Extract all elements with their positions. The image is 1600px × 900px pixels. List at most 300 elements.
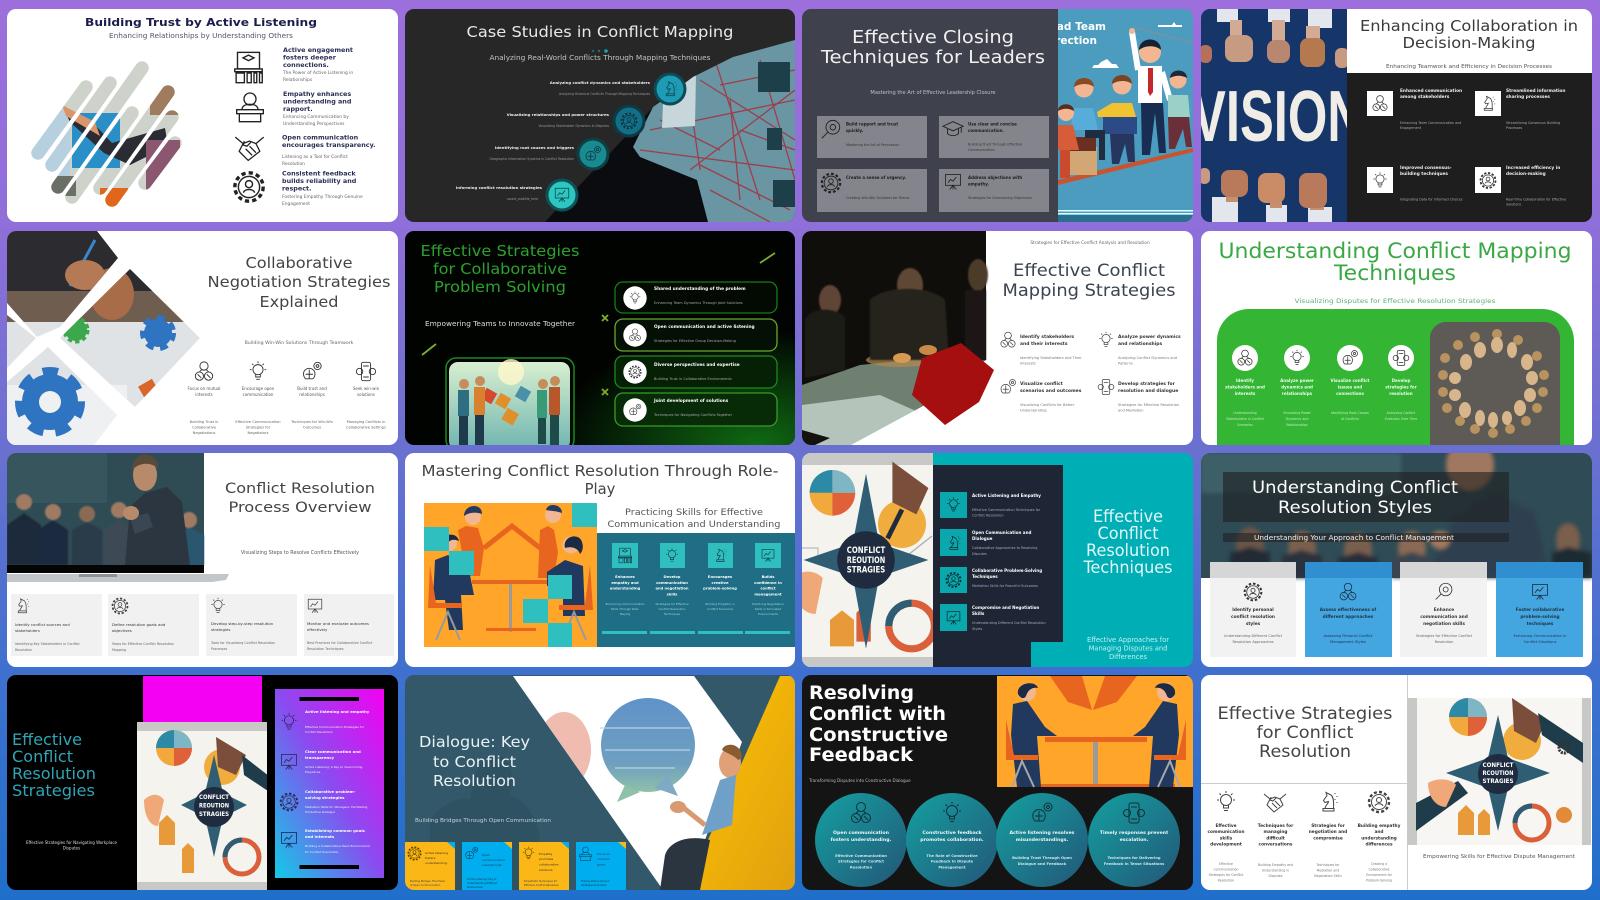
- step card 3: Tools for Visualizing Conflict Resolution: [210, 641, 275, 645]
- column 2: Encourage open: [242, 386, 275, 391]
- title: Dialogue: Key: [419, 733, 530, 751]
- box: rapport: Build rapport and trust: [846, 122, 898, 126]
- title: [820, 30, 1044, 66]
- step card 4: effectively: [307, 627, 328, 632]
- bubble 1: Effective Communication: [835, 854, 887, 858]
- laptop with pointing man photo: [7, 453, 229, 582]
- title: Play: [585, 481, 616, 498]
- decorative sparks: [422, 253, 775, 395]
- column 2: [650, 543, 695, 634]
- title: Resolving: [809, 683, 914, 704]
- style card 4: Enhancing Communication in: [1514, 634, 1566, 638]
- item 3: [281, 789, 367, 814]
- column 1: skills: [1220, 835, 1233, 841]
- item 2: [282, 749, 362, 774]
- bubble 1: Strategies for Conflict: [838, 860, 884, 864]
- item 3: Visualizing Conflicts for Better: [1020, 403, 1075, 407]
- item 2: Clear communication and: [305, 749, 361, 754]
- title: [12, 730, 96, 800]
- column 4: Environments: [758, 612, 778, 616]
- speech bubbles and speaker: [513, 676, 795, 890]
- tile 4: goals.: [597, 862, 606, 866]
- tile 1: understanding.: [425, 861, 448, 865]
- style card 4: Conflict Situations: [1524, 640, 1556, 644]
- conflict strategies poster: [1407, 698, 1591, 845]
- column 4: differences: [1365, 842, 1393, 848]
- title: Resolution: [12, 764, 96, 783]
- girl figure: [1058, 108, 1074, 121]
- column 2: dynamics and: [1281, 384, 1313, 390]
- title: [809, 683, 948, 766]
- boss figure: [1132, 32, 1138, 70]
- list item 2: Empathy enhances: [283, 90, 351, 98]
- step 2: Visualizing relationships and power structures: [507, 112, 610, 117]
- column 2: Conflict Resolution: [658, 607, 686, 611]
- tile 1: of Open Communication: [410, 883, 441, 887]
- column 2: skills: [667, 592, 678, 596]
- column 4: Problem-Solving: [1366, 878, 1392, 882]
- item 4: Strategies for Effective Resolution: [1118, 403, 1179, 407]
- style card 2: [1305, 562, 1392, 657]
- slide card: Understanding Conflict Mapping Techniques: [1201, 231, 1592, 445]
- title: [1362, 20, 1577, 51]
- slide card: Conflict Resolution Process Overview: [7, 453, 398, 667]
- gradient list panel: [275, 689, 384, 878]
- title: Building Trust by Active Listening: [85, 16, 317, 29]
- dark list panel: [933, 465, 1063, 667]
- conflict strategies poster: CONFLICT: [199, 793, 229, 801]
- column 4: management: [754, 592, 782, 596]
- list item 2: Enhancing Communication by: [283, 114, 349, 120]
- column 1: Enhances: [615, 575, 636, 579]
- slide card: Mastering Conflict Resolution Through Role-Play: [405, 453, 796, 667]
- box: objections: Address objections with: [968, 175, 1022, 180]
- bubble 4: Techniques for Delivering: [1107, 856, 1161, 860]
- teal content panel: [597, 533, 796, 647]
- title: Enhancing Collaboration in: [1360, 17, 1578, 35]
- item 2: and relationships: [1118, 341, 1163, 347]
- bubble 1: Resolution: [850, 865, 872, 869]
- column 1: Playing: [620, 612, 630, 616]
- step 1: Analyzing conflict dynamics and stakeholders: [550, 80, 651, 85]
- column 1: understanding: [610, 587, 641, 591]
- title: Effective: [12, 730, 82, 749]
- list item 4: respect.: [282, 184, 311, 192]
- tile 4: Focus on: [597, 852, 610, 856]
- step 3: Geographic Information Systems in Conflict Resolution: [489, 157, 574, 161]
- subtitle: Empowering Teams to Innovate Together: [425, 319, 575, 328]
- column 4: [745, 543, 790, 634]
- step card 1: [11, 594, 102, 656]
- step 3: [489, 138, 610, 170]
- style card 1: Identify personal: [1232, 607, 1274, 613]
- item 1: [1001, 332, 1082, 366]
- style card 1: Resolution Approaches: [1232, 640, 1274, 644]
- style card 3: negotiation skills: [1423, 621, 1465, 627]
- item 2: sharing processes: [1506, 94, 1550, 100]
- item 3: Productive Dialogue: [305, 810, 335, 814]
- subtitle: Practicing Skills for Effective: [625, 508, 763, 518]
- title: Conflict with: [809, 704, 946, 725]
- tile 2: communication: [482, 858, 505, 862]
- title: [420, 242, 580, 296]
- column 4: Collaborative Settings: [346, 426, 386, 430]
- column 1: empathy and: [611, 581, 639, 585]
- item 1: Engagement: [1400, 126, 1422, 130]
- item 4: Styles: [972, 627, 983, 631]
- item 2: Active Listening: A Key to Overcoming: [305, 765, 362, 769]
- subtitle: Visualizing Disputes for Effective Resolution Strategies: [1294, 297, 1496, 305]
- title: Conflict Resolution: [225, 481, 375, 497]
- horizontal divider: [1201, 783, 1407, 784]
- title: Resolution: [1259, 742, 1351, 761]
- column 3: Techniques for: [1315, 863, 1340, 867]
- column 3: of Conflicts: [1341, 417, 1359, 421]
- magenta block: [143, 676, 262, 722]
- diagonal photo strips: [31, 61, 182, 207]
- tile 4: Finding Mutual Ground: [581, 879, 610, 883]
- title: for Conflict: [1256, 723, 1354, 742]
- top subtitle: Strategies for Effective Conflict Analysis and Resolution: [1030, 240, 1150, 246]
- style card 3: [1400, 562, 1487, 657]
- slide card: Effective Conflict Resolution Techniques: [792, 453, 1193, 667]
- subtitle: [608, 508, 780, 530]
- title: Effective Strategies: [1218, 704, 1392, 723]
- subtitle: Building Win-Win Solutions Through Teamwork: [245, 340, 354, 346]
- item 1: Enhancing Team Communication and: [1400, 121, 1461, 125]
- title: [208, 254, 390, 311]
- column 4: Evolution Over Time: [1385, 417, 1417, 421]
- bubble 3: Building Trust Through Open: [1012, 856, 1072, 860]
- column 3: Conflict Scenarios: [707, 607, 733, 611]
- item 2: [1475, 88, 1565, 130]
- silhouette behind overlay: [430, 755, 540, 890]
- title: Mastering Conflict Resolution Through Role-: [422, 463, 778, 480]
- conflict strategies poster: RCOUTION: [1482, 769, 1514, 777]
- item 1: [940, 492, 1041, 518]
- slide card: Building Trust by Active Listening: [7, 9, 398, 222]
- style card 4: Foster collaborative: [1516, 607, 1564, 613]
- white diagonal cut: [851, 360, 986, 445]
- slide card: Collaborative Negotiation Strategies Explained: [7, 231, 398, 447]
- column 1: Resolution: [1218, 878, 1234, 882]
- step card 3: Develop step-by-step resolution: [211, 621, 274, 626]
- style card 3: communication and: [1420, 614, 1468, 620]
- column 4: [1358, 792, 1401, 882]
- box: clear communication: Use clear and concise: [968, 122, 1017, 126]
- title: Resolution: [1086, 541, 1170, 560]
- item 1: Interests: [1020, 362, 1036, 366]
- item 4: decision-making: [1506, 171, 1546, 177]
- bubble 4: Feedback in Tense Situations: [1104, 862, 1165, 866]
- column 4: solutions: [357, 392, 375, 397]
- box: urgency: [817, 169, 927, 212]
- item 3: Collaborative problem-: [305, 789, 356, 794]
- title: to Conflict: [433, 753, 516, 771]
- title: Conflict: [12, 747, 73, 766]
- column 2: Disputes: [1269, 874, 1283, 878]
- column 4: Skills in Simulated: [755, 607, 781, 611]
- item 4: Skills: [972, 611, 985, 616]
- slide card: Effective Conflict Mapping Strategies: [802, 231, 1193, 445]
- title: [1218, 239, 1572, 285]
- style card 3: Strategies for Effective Conflict: [1416, 634, 1473, 638]
- tile 1: fosters: [425, 856, 436, 860]
- item 2: Analyzing Conflict Dynamics and: [1118, 356, 1177, 360]
- vertical divider: [1407, 675, 1408, 890]
- column 3: issues and: [1338, 384, 1362, 390]
- title: for Collaborative: [433, 260, 567, 278]
- list item 2: Understanding Perspectives: [283, 121, 345, 127]
- column 2: conversations: [1259, 842, 1293, 848]
- title: Conflict: [1098, 524, 1159, 543]
- column 4: Seek win-win: [353, 386, 380, 391]
- box: clear communication: Building Trust Through Effective: [968, 142, 1022, 146]
- conflict strategies poster: REOUTION: [847, 555, 885, 565]
- vision photo: VISION: [1192, 77, 1364, 157]
- item 2: [1099, 332, 1181, 366]
- box: urgency: Creating Win-Win Solutions for Teams: [846, 196, 910, 200]
- tile 2: [462, 842, 512, 890]
- puzzle team illustration: [446, 358, 574, 450]
- item 3: Understanding: [1020, 408, 1046, 412]
- column 4: resolution: [1389, 391, 1413, 396]
- item 1: Effective Communication Techniques for: [972, 508, 1041, 512]
- item 3: Collaborative Problem-Solving: [972, 568, 1042, 573]
- right figure: [1170, 76, 1186, 88]
- column 4: Analyzing Conflict: [1387, 411, 1416, 415]
- item 4: and interests: [305, 834, 335, 839]
- column 1: Strategies for Conflict: [1209, 873, 1244, 877]
- subtitle: [1087, 636, 1169, 661]
- step 2: Visualizing Stakeholder Dynamics in Disputes: [538, 124, 609, 128]
- wooden pegs photo: [1430, 322, 1560, 445]
- column 1: development: [1210, 842, 1242, 848]
- box: objections: [939, 169, 1049, 212]
- bubble 1: [815, 793, 907, 887]
- column 1: Skills Through Role-: [611, 607, 639, 611]
- column 2: Effective Communication: [235, 420, 281, 424]
- column 3: Encourages: [708, 575, 733, 579]
- title: Effective Conflict: [1013, 261, 1165, 281]
- vision photo: [1201, 9, 1347, 222]
- tile 3: [519, 842, 569, 890]
- title: [1083, 507, 1172, 577]
- column 4: understanding: [1361, 835, 1397, 841]
- step card 1: Resolution: [15, 648, 32, 652]
- box: rapport: [817, 116, 927, 158]
- step 2: [507, 104, 646, 138]
- red hexagon: [912, 343, 994, 425]
- item 3: Mediation Skills for Peaceful Outcomes: [972, 584, 1038, 588]
- title: Understanding Conflict: [1252, 477, 1458, 497]
- column 1: Negotiations: [193, 431, 215, 435]
- item 4: Building a Collaborative Team Environment: [305, 844, 371, 848]
- step 4: Informing conflict resolution strategies: [456, 185, 543, 190]
- subtitle: Disputes: [63, 846, 80, 850]
- item 3: Diverse perspectives and expertise: [654, 362, 740, 368]
- title: Techniques for Leaders: [820, 47, 1045, 68]
- box: clear communication: Communication: [968, 148, 995, 152]
- step card 1: Identifying Key Stakeholders in Conflict: [15, 642, 80, 646]
- left dark panel: [802, 9, 1058, 222]
- column 2: Building Empathy and: [1258, 863, 1293, 867]
- column 3: relationships: [299, 392, 325, 397]
- column 2: Strategies for: [246, 426, 271, 430]
- column 2: Techniques: [663, 612, 681, 616]
- step 3: Identifying root causes and triggers: [495, 145, 575, 150]
- subtitle: Effective Approaches for: [1087, 636, 1169, 644]
- title: [419, 733, 530, 790]
- green panel: [1217, 309, 1574, 445]
- tile 3: promotes: [539, 857, 554, 861]
- item 1: [282, 709, 370, 734]
- bubble 2: Constructive feedback: [922, 830, 983, 836]
- slide card: Effective Closing Techniques for Leaders: [802, 9, 1193, 223]
- conflict strategies poster: [137, 722, 274, 890]
- column 1: communication: [1207, 829, 1245, 835]
- style card 4: problem-solving: [1520, 614, 1560, 620]
- item 2: Analyze power dynamics: [1118, 334, 1181, 340]
- column 2: managing: [1263, 829, 1288, 835]
- item 4: [1098, 380, 1179, 412]
- column 1: Identify: [1236, 378, 1254, 383]
- column 1: [1225, 345, 1265, 427]
- column 1: Focus on mutual: [187, 386, 221, 391]
- item 2: Prejudices: [305, 770, 321, 774]
- tile 2: Understanding Different: [467, 881, 497, 885]
- list item 1: [235, 46, 353, 83]
- style card 2: different approaches: [1323, 614, 1374, 620]
- subtitle: Enhancing Teamwork and Efficiency in Decision Processes: [1386, 64, 1552, 70]
- item 1: Enhancing Team Dynamics Through Joint Solutions: [654, 301, 743, 305]
- column 2: [1280, 345, 1314, 427]
- conflict strategies poster: STRAGIES: [1482, 777, 1514, 785]
- step card 3: Processes: [211, 647, 228, 651]
- step card 3: strategies: [211, 627, 230, 632]
- list item 4: builds reliability and: [282, 177, 357, 185]
- bubble 4: [1088, 793, 1180, 887]
- item 1: Effective Communication Strategies for: [305, 725, 365, 729]
- item 1: [615, 282, 777, 313]
- top bar: [300, 697, 359, 701]
- step card 4: [304, 594, 394, 656]
- slide card: Effective Conflict Resolution Strategies: [7, 675, 398, 890]
- box: rapport: quickly.: [846, 128, 864, 133]
- title: Negotiation Strategies: [208, 273, 390, 291]
- dark content panel: [1347, 73, 1592, 222]
- column 1: [1207, 791, 1245, 882]
- item 2: Patterns: [1118, 362, 1133, 366]
- column 2: Techniques for: [1258, 823, 1294, 829]
- column 3: [698, 543, 743, 634]
- column 2: and negotiation: [655, 587, 689, 591]
- slide card: Resolving Conflict with Constructive Feedback: [802, 675, 1193, 890]
- title: [1252, 477, 1458, 517]
- column 3: negotiation and: [1309, 829, 1347, 835]
- style card 3: Resolution: [1435, 640, 1453, 644]
- column 3: Identifying Root Causes: [1331, 411, 1369, 415]
- column 1: Building Trust in: [190, 420, 218, 424]
- team leadership illustration: [1058, 9, 1193, 222]
- column 1: stakeholders and: [1225, 384, 1265, 390]
- style card 4: techniques: [1527, 621, 1554, 627]
- column 1: Collaborative: [192, 426, 217, 430]
- step card 2: Steps for Effective Conflict Resolution: [112, 642, 174, 646]
- subtitle: Understanding Your Approach to Conflict Management: [1254, 533, 1454, 542]
- item 2: [940, 529, 1037, 556]
- title: Effective Closing: [852, 27, 1014, 48]
- list item 1: Active engagement: [283, 46, 353, 54]
- item 4: Joint development of solutions: [653, 398, 729, 404]
- list item 2: [237, 90, 352, 127]
- step card 4: Resolution Techniques: [307, 647, 344, 651]
- box: objections: Strategies for Overcoming Objections: [968, 196, 1032, 200]
- tile 2: s builds trust.: [482, 863, 502, 867]
- column 4: Practicing Negotiation: [752, 602, 784, 606]
- title: Resolution: [433, 772, 516, 790]
- bubble 2: Management: [938, 865, 966, 869]
- item 4: resolution and dialogue: [1118, 388, 1178, 394]
- role play illustration: [424, 503, 597, 647]
- column 1: Communication: [1213, 868, 1239, 872]
- item 3: Techniques: [972, 574, 998, 579]
- item 4: Compromise and Negotiation: [972, 605, 1039, 610]
- title: Collaborative: [246, 254, 352, 272]
- item 3: [1367, 165, 1463, 202]
- item 4: Develop strategies for: [1118, 381, 1176, 387]
- column 3: [1309, 792, 1347, 878]
- item 4: [282, 828, 371, 854]
- column 3: Visualize conflict: [1331, 378, 1370, 383]
- column 2: communication: [656, 581, 688, 585]
- diamond photo collage: [7, 231, 207, 447]
- bubble 4: escalation.: [1120, 837, 1149, 843]
- item 4: [1475, 165, 1566, 206]
- bubble 1: Open communication: [833, 830, 889, 836]
- style card 4: [1496, 562, 1583, 657]
- column 4: [1385, 345, 1417, 421]
- bubble 3: misunderstandings.: [1016, 837, 1068, 843]
- title: Strategies: [12, 781, 95, 800]
- column 4: Managing Conflicts in: [347, 420, 385, 424]
- column 3: Building Empathy in: [705, 602, 735, 606]
- list item 1: connections.: [283, 61, 329, 69]
- blurred boardroom photo: [1201, 439, 1592, 578]
- item 1: Identify stakeholders: [1020, 334, 1074, 340]
- item 4: Increased efficiency in: [1506, 165, 1560, 171]
- column 3: Outcomes: [303, 426, 321, 430]
- item 2: Open communication and active listening: [654, 324, 755, 330]
- title: Decision-Making: [1402, 34, 1536, 52]
- list item 3: encourages transparency.: [282, 141, 376, 149]
- title: Effective Strategies: [420, 242, 580, 260]
- subtitle: Mastering the Art of Effective Leadership Closure: [870, 90, 996, 96]
- column 1: [187, 362, 221, 435]
- list item 4: Engagement: [282, 201, 310, 207]
- item 2: Processes: [1506, 126, 1523, 130]
- tile 4: Strategies that Work: [581, 883, 607, 887]
- column 4: confidence in: [754, 581, 782, 585]
- slide card: Enhancing Collaboration in Decision-Making: [1192, 9, 1592, 222]
- list item 4: Consistent feedback: [282, 170, 356, 178]
- subtitle: Visualizing Steps to Resolve Conflicts Effectively: [241, 550, 359, 556]
- column 2: Analyze power: [1280, 378, 1314, 383]
- step 1: [550, 72, 686, 106]
- item 4: and Mediation: [1118, 408, 1144, 412]
- slide card: Case Studies in Conflict Mapping: [405, 9, 800, 225]
- bubble 1: fosters understanding.: [831, 837, 892, 843]
